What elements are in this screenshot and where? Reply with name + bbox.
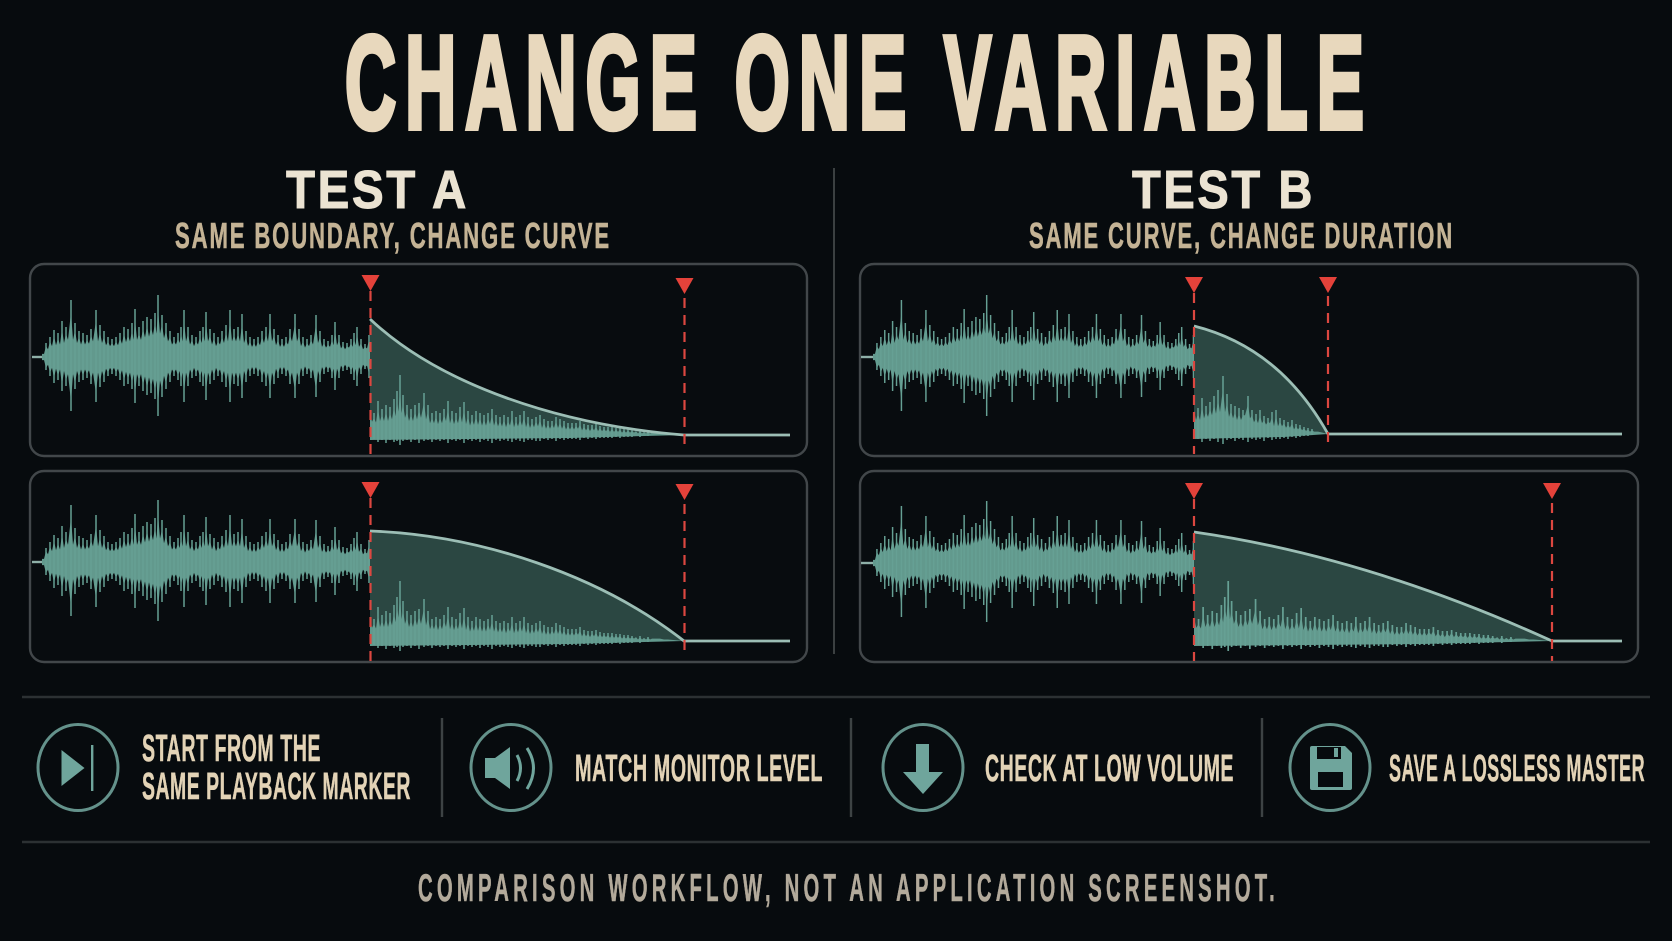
icon: floppy disk [1290, 724, 1370, 810]
boundary marker start [1185, 277, 1203, 454]
step: low volume [883, 724, 1234, 810]
subheading: test A: SAME BOUNDARY, CHANGE CURVE [175, 215, 611, 256]
decaying waveform [1194, 581, 1552, 651]
boundary marker end [1319, 277, 1337, 444]
waveform before boundary [873, 295, 1194, 416]
boundary marker end [1543, 483, 1561, 661]
icon: speaker [471, 724, 551, 810]
icon: skip to marker [38, 724, 118, 810]
label: playback marker [142, 728, 411, 808]
panel: test A exponential curve [30, 264, 807, 456]
boundary marker start [1185, 483, 1203, 661]
waveform before boundary [873, 501, 1194, 622]
panel: test B long duration [860, 471, 1638, 662]
decaying waveform [370, 581, 684, 651]
label: low volume: CHECK AT LOW VOLUME [985, 748, 1234, 790]
fade curve [1194, 532, 1622, 641]
panel: test A convex curve [30, 471, 807, 662]
step: monitor level [471, 724, 823, 810]
fade area [1194, 532, 1552, 641]
fade area [370, 319, 684, 435]
fade area [1194, 326, 1328, 434]
fade curve [370, 531, 790, 641]
fade area [370, 531, 684, 641]
label: playback marker: START FROM THE [142, 728, 321, 770]
fade curve [1194, 326, 1622, 434]
boundary marker end [676, 484, 694, 652]
step: playback marker [38, 724, 411, 810]
fade curve [370, 319, 790, 435]
label: monitor level: MATCH MONITOR LEVEL [575, 748, 823, 790]
heading: test A: TEST A [286, 160, 469, 220]
boundary marker start [362, 482, 380, 661]
panel: test B short duration [860, 264, 1638, 456]
label: playback marker: SAME PLAYBACK MARKER [142, 766, 411, 808]
waveform before boundary [42, 500, 370, 621]
boundary marker start [362, 275, 380, 454]
waveform before boundary [42, 295, 370, 416]
icon: down arrow [883, 724, 963, 810]
boundary marker end [676, 278, 694, 445]
decaying waveform [1194, 376, 1328, 444]
step: lossless master [1290, 724, 1645, 810]
decaying waveform [370, 375, 684, 445]
heading: test B: TEST B [1132, 160, 1315, 220]
